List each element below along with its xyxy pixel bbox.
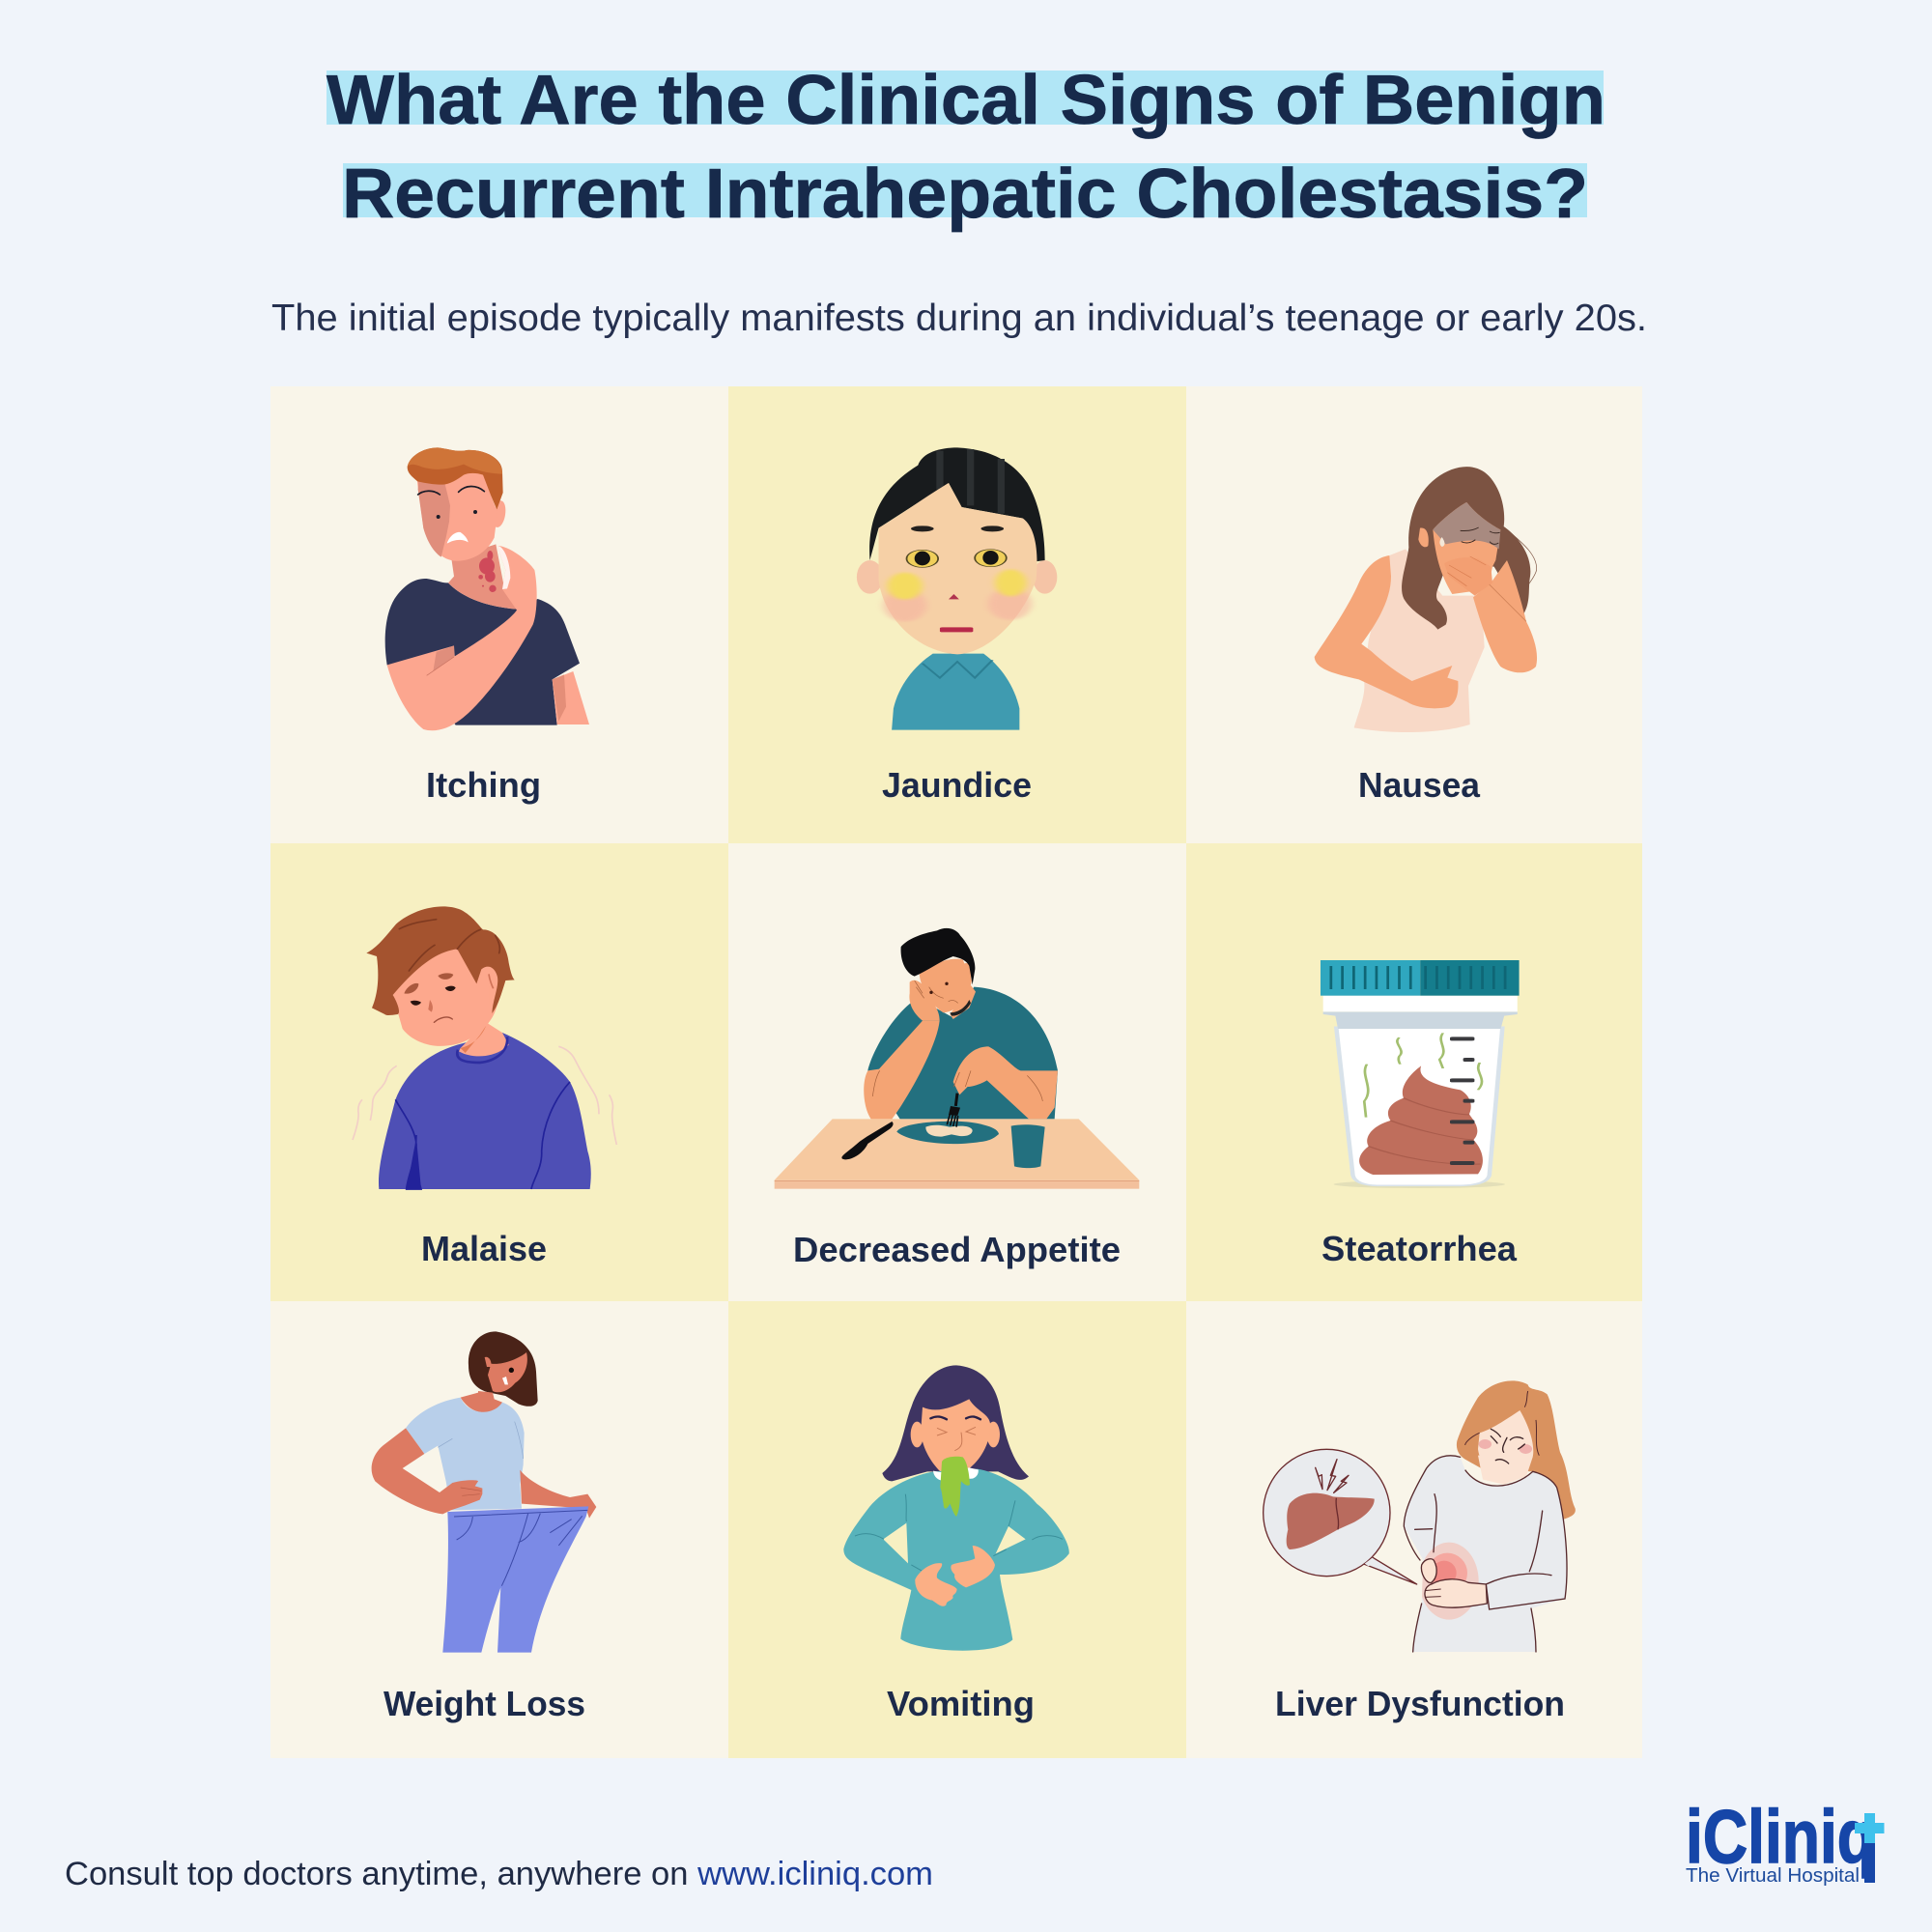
panel: malaise bbox=[270, 843, 728, 1301]
panel: nausea bbox=[1186, 386, 1642, 843]
title: What Are the Clinical Signs of Benign bbox=[327, 62, 1605, 139]
panel: weight loss bbox=[270, 1301, 728, 1758]
logo: iCliniq: The Virtual Hospital bbox=[1686, 1865, 1860, 1887]
panel: decreased appetite bbox=[728, 843, 1186, 1301]
icon: tired boy in purple sweater bbox=[353, 906, 616, 1189]
icon: woman covering mouth bbox=[1315, 467, 1537, 732]
label: decreased appetite: Decreased Appetite bbox=[793, 1230, 1121, 1269]
icon: man at table not eating bbox=[775, 928, 1139, 1189]
icon: woman holding loose trousers bbox=[372, 1331, 596, 1653]
label: malaise: Malaise bbox=[421, 1229, 547, 1268]
icon: man scratching rash on neck bbox=[385, 447, 589, 730]
label: steatorrhea: Steatorrhea bbox=[1321, 1229, 1518, 1268]
panel: steatorrhea bbox=[1186, 843, 1642, 1301]
panel: itching bbox=[270, 386, 728, 843]
label: itching: Itching bbox=[426, 765, 541, 805]
title bbox=[327, 62, 1605, 233]
label: vomiting: Vomiting bbox=[887, 1684, 1035, 1723]
label: weight loss: Weight Loss bbox=[384, 1684, 585, 1723]
panel: liver dysfunction bbox=[1186, 1301, 1642, 1758]
subtitle: The initial episode typically manifests during an individual’s teenage or early 20s. bbox=[271, 298, 1647, 339]
footer text: Consult top doctors anytime, anywhere on www.icliniq.com bbox=[65, 1856, 933, 1892]
label: jaundice: Jaundice bbox=[882, 765, 1032, 805]
icon: woman with liver pain callout bbox=[1264, 1380, 1576, 1652]
label: liver dysfunction: Liver Dysfunction bbox=[1275, 1684, 1565, 1723]
icon: woman vomiting bbox=[843, 1365, 1069, 1651]
logo: iCliniq: iCliniq bbox=[1686, 1794, 1875, 1879]
label: nausea: Nausea bbox=[1358, 765, 1481, 805]
icon: specimen jar with fatty stool bbox=[1321, 960, 1520, 1188]
panel: vomiting bbox=[728, 1301, 1186, 1758]
panel: jaundice bbox=[728, 386, 1186, 843]
icon: boy with yellow eyes and cheeks bbox=[857, 447, 1057, 730]
title: Recurrent Intrahepatic Cholestasis? bbox=[342, 156, 1588, 233]
